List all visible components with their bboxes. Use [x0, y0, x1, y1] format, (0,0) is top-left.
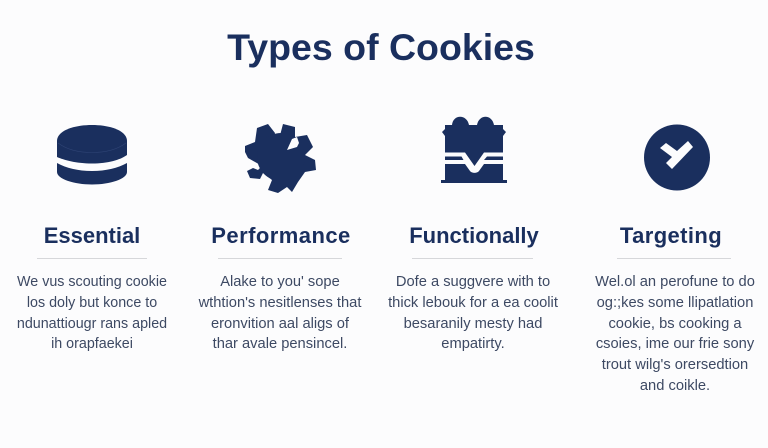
description: functionally	[388, 274, 558, 352]
panel: targeting	[595, 223, 755, 394]
icon: storage building	[441, 116, 507, 183]
title: Types of Cookies	[227, 26, 535, 68]
description: targeting: Wel.ol an perofune to do	[595, 274, 755, 290]
description: targeting: cookie, bs cooking a	[608, 316, 742, 332]
panel: performance	[198, 223, 362, 352]
description: performance: eronvition aal aligs of	[211, 316, 349, 332]
heading: functionally: Functionally	[409, 223, 539, 248]
icon: check circle	[644, 124, 710, 190]
description: functionally: empatirty.	[441, 336, 505, 352]
heading: essential: Essential	[44, 223, 140, 248]
panel: functionally	[388, 223, 558, 352]
icon: gear	[245, 124, 316, 193]
panel: essential	[17, 223, 167, 352]
description: targeting: csoies, ime our frie sony	[596, 336, 754, 352]
description: essential: ndunattiougr rans apled	[17, 316, 167, 332]
description: performance: thar avale pensincel.	[213, 336, 347, 352]
heading: targeting: Targeting	[620, 223, 722, 248]
description: targeting	[595, 274, 755, 394]
description: performance: Alake to you' sope	[220, 274, 340, 290]
description: functionally: Dofe a suggvere with to	[396, 274, 550, 290]
description: functionally: besaranily mesty had	[404, 316, 542, 332]
description: targeting: and coikle.	[640, 378, 710, 394]
description: targeting: trout wilg's orersedtion	[602, 357, 748, 373]
description: performance	[198, 274, 362, 352]
description: performance: wthtion's nesitlenses that	[199, 295, 361, 311]
description: targeting: og:;kes some llipatlation	[597, 295, 753, 311]
description: essential: ih orapfaekei	[51, 336, 133, 352]
description: essential: los doly but konce to	[27, 295, 157, 311]
description: essential: We vus scouting cookie	[17, 274, 167, 290]
icon: disc stack	[57, 125, 127, 184]
description: essential	[17, 274, 167, 352]
description: functionally: thick lebouk for a ea coolit	[388, 295, 558, 311]
heading: performance: Performance	[211, 223, 351, 248]
